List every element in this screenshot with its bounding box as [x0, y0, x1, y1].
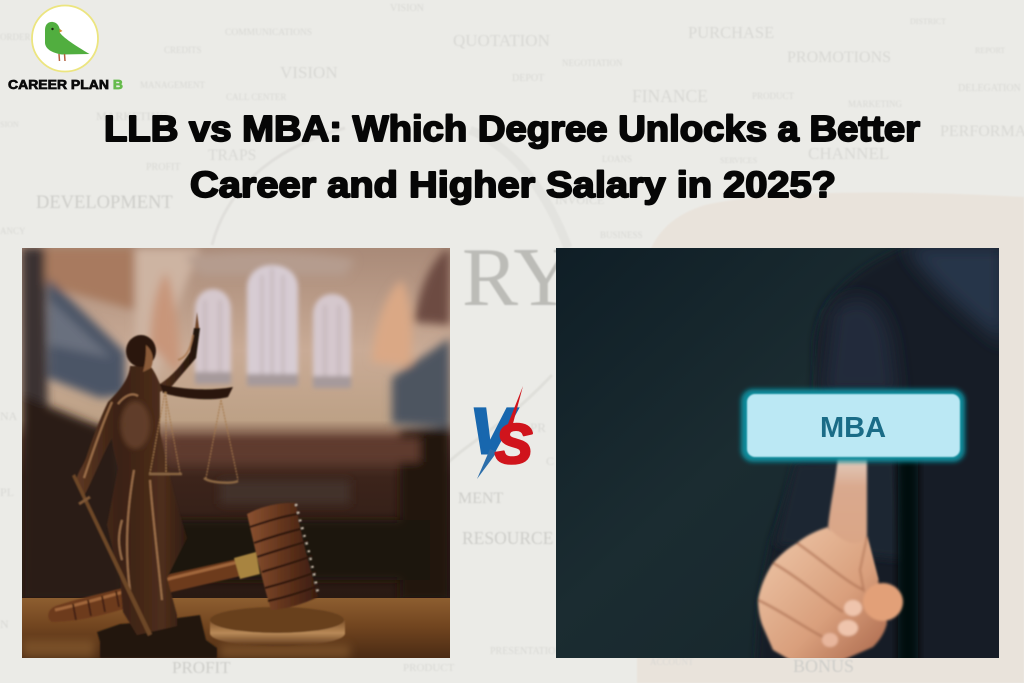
MBA label: MBA [820, 412, 886, 444]
statue head [126, 335, 156, 372]
background: faint business words and magnifying glass: VISION [280, 63, 338, 82]
logo wordmark: CAREER PLAN B [8, 78, 123, 92]
background: faint business words and magnifying glass: ANCY [0, 226, 26, 236]
background: faint business words and magnifying glass: PL [0, 485, 14, 499]
logo: Career Plan B [8, 6, 123, 92]
background: faint business words and magnifying glass: CALL CENTER [226, 92, 286, 102]
background: faint business words and magnifying glass: PRESENTATION [490, 646, 563, 657]
background: faint business words and magnifying glass: ORDER [0, 32, 31, 42]
background: faint business words and magnifying glass: SERVICES [720, 156, 757, 165]
background: faint business words and magnifying glass: NEGOTIATION [562, 58, 623, 68]
background: faint business words and magnifying glass: PROFIT [146, 162, 180, 173]
background: faint business words and magnifying glass: PURCHASE [688, 23, 774, 42]
statue base [97, 615, 217, 658]
background: faint business words and magnifying glass: BONUS [793, 656, 854, 676]
businessman suit [756, 240, 1010, 670]
raised sword hilt [195, 312, 199, 328]
background: faint business words and magnifying glass: RESOURCE [462, 528, 553, 548]
gavel sound block [210, 607, 345, 646]
background: faint business words and magnifying glass: COMMUNICATIONS [225, 28, 312, 38]
index finger [828, 455, 878, 600]
sword [72, 474, 152, 636]
cathedral windows [195, 265, 351, 388]
background: faint business words and magnifying glass: TRAPS [208, 147, 256, 164]
background: faint business words and magnifying glass: BUSINESS [600, 230, 643, 240]
lightning bolt: upper red sliver [504, 386, 523, 434]
gavel [48, 503, 345, 646]
letter S: S [495, 412, 532, 475]
statue: Lady Justice [72, 312, 238, 658]
statue highlights [84, 335, 193, 600]
background: faint business words and magnifying glass: LOANS [602, 154, 632, 164]
background: faint business words and magnifying glass: C [546, 454, 554, 468]
hand [758, 527, 903, 660]
background: faint business words and magnifying glass: MARKETING [96, 109, 168, 123]
background: faint business words and magnifying glass: INVOICE [555, 193, 604, 207]
background: faint business words and magnifying glass: DEPOT [512, 73, 544, 84]
background: faint business words and magnifying glass: N [0, 617, 9, 631]
background: faint business words and magnifying glass: MARKETING [848, 99, 902, 109]
background: faint business words and magnifying glass: CHANNEL [808, 144, 889, 163]
scale beam [160, 384, 233, 399]
background: faint business words and magnifying glass: PROMOTIONS [787, 49, 891, 66]
background: faint business words and magnifying glass: NA [0, 409, 18, 423]
background: faint business words and magnifying glass: PROFIT [172, 658, 231, 677]
background: faint business words and magnifying glass: DISTRICT [910, 17, 946, 26]
title line 2: Career and Higher Salary in 2025? [190, 164, 836, 205]
background: faint business words and magnifying glass: RY [462, 231, 574, 324]
panel: LLB photo, Lady Justice and gavel [22, 248, 450, 658]
letter V: V [470, 395, 518, 467]
background: faint business words and magnifying glass: DELEGATION [958, 83, 1021, 94]
background: faint business words and magnifying glass: QUOTATION [453, 31, 550, 50]
background: faint business words and magnifying glass: DEVELOPMENT [36, 193, 173, 213]
title [104, 108, 920, 205]
background: faint business words and magnifying glass: SION [0, 120, 19, 129]
icon: VS badge with lightning bolt [470, 386, 532, 479]
icon: green bird [45, 22, 90, 61]
gavel head [247, 503, 319, 610]
background: faint business words and magnifying glass: CREDITS [164, 45, 202, 55]
scales [149, 392, 238, 483]
background: faint business words and magnifying glass: PRODUCT [752, 91, 795, 101]
background: faint business words and magnifying glass: MENT [458, 490, 504, 507]
title line 1: LLB vs MBA: Which Degree Unlocks a Better [104, 108, 920, 149]
background: faint business words and magnifying glass: ACCOUNT [650, 657, 694, 667]
statue body and robes [76, 328, 200, 635]
MBA button [747, 394, 960, 457]
background: faint business words and magnifying glass: FINANCE [632, 86, 708, 106]
logo badge circle [32, 6, 98, 72]
background: faint business words and magnifying glass: PRODUCT [403, 662, 455, 674]
background: faint business words and magnifying glass: PR [530, 420, 546, 435]
dark background [556, 248, 916, 658]
courtroom hall backdrop [22, 248, 450, 598]
background: faint business words and magnifying glass: MANAGEMENT [140, 80, 205, 90]
background: faint business words and magnifying glass: REPORT [975, 46, 1005, 55]
lightning bolt: lower blue sliver [477, 449, 497, 479]
background: faint business words and magnifying glass: VISION [390, 3, 424, 14]
button glow [741, 389, 965, 462]
gavel handle [48, 552, 260, 622]
wooden table [22, 598, 450, 658]
panel: MBA photo, finger touching glowing button [556, 240, 1010, 670]
